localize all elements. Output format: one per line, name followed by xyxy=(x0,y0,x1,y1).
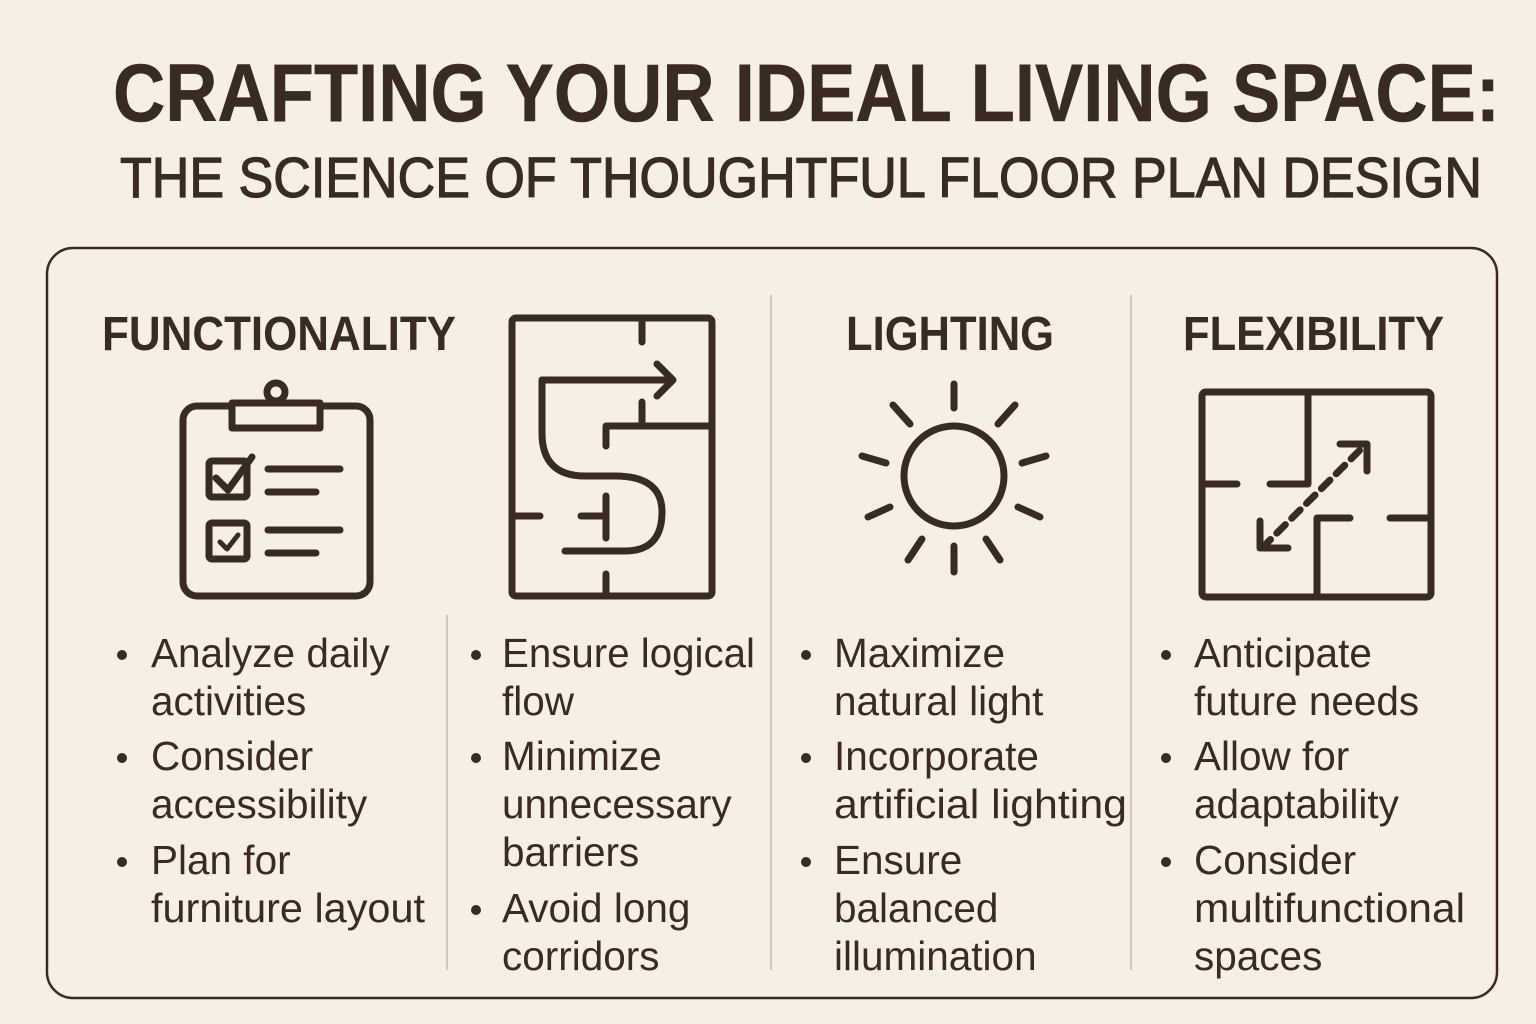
bullets: functionality: accessibility xyxy=(151,781,368,827)
heading: flexibility: FLEXIBILITY xyxy=(1183,308,1444,361)
bullets: functionality: activities xyxy=(151,678,306,724)
heading: functionality: FUNCTIONALITY xyxy=(102,308,456,361)
bullets: flow xyxy=(471,630,755,979)
bullets: flow: barriers xyxy=(502,829,639,875)
bullets: lighting: Maximize xyxy=(834,630,1005,676)
bullets: functionality: Analyze daily xyxy=(151,630,390,676)
bullets: flow: Minimize xyxy=(502,733,662,779)
bullets: functionality xyxy=(117,630,425,931)
bullets: flexibility: Consider xyxy=(1194,837,1356,883)
bullets: lighting xyxy=(801,630,1127,979)
icon: clipboard xyxy=(183,383,370,596)
bullets: flow: unnecessary xyxy=(502,781,732,827)
bullets: flow: flow xyxy=(502,678,575,724)
icon: sun xyxy=(862,384,1046,572)
heading: lighting: LIGHTING xyxy=(846,308,1054,361)
bullets: lighting: artificial lighting xyxy=(834,781,1127,827)
bullets: functionality: Consider xyxy=(151,733,313,779)
bullets: functionality: furniture layout xyxy=(151,885,425,931)
icon: floor plan flow xyxy=(512,318,712,596)
bullets: flexibility: spaces xyxy=(1194,933,1322,979)
bullets: lighting: Incorporate xyxy=(834,733,1039,779)
bullets: flow: Avoid long xyxy=(502,885,690,931)
bullets: lighting: illumination xyxy=(834,933,1037,979)
icon: flexible floor plan xyxy=(1202,392,1431,597)
bullets: flexibility xyxy=(1161,630,1465,979)
bullets: flexibility: Anticipate xyxy=(1194,630,1372,676)
panel: main xyxy=(47,248,1497,998)
bullets: flow: Ensure logical xyxy=(502,630,755,676)
bullets: lighting: Ensure xyxy=(834,837,962,883)
bullets: lighting: natural light xyxy=(834,678,1043,724)
bullets: flow: corridors xyxy=(502,933,660,979)
bullets: flexibility: adaptability xyxy=(1194,781,1400,827)
bullets: flexibility: multifunctional xyxy=(1194,885,1465,931)
bullets: flexibility: future needs xyxy=(1194,678,1419,724)
bullets: flexibility: Allow for xyxy=(1194,733,1349,779)
bullets: lighting: balanced xyxy=(834,885,998,931)
bullets: functionality: Plan for xyxy=(151,837,291,883)
